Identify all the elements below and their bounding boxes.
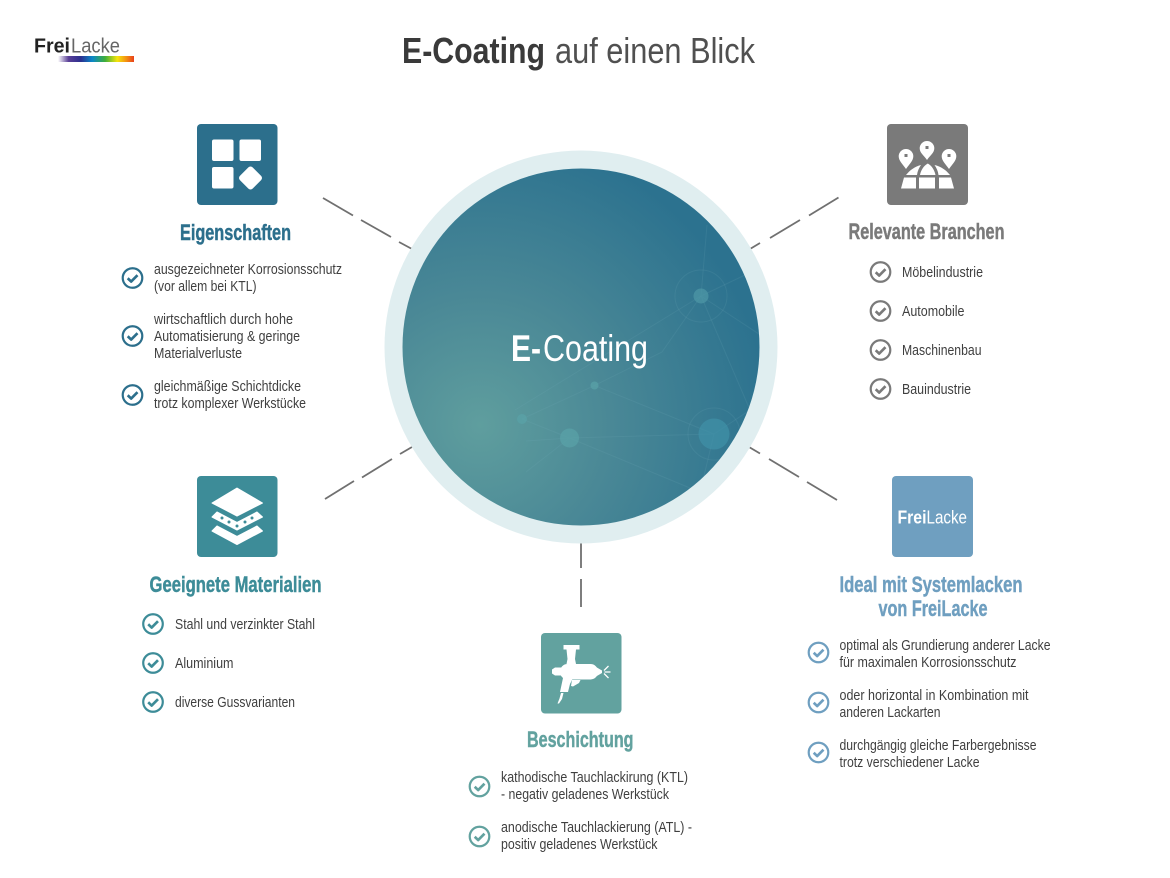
icon: spray gun bbox=[541, 633, 622, 714]
circle label: Coating bbox=[543, 328, 648, 369]
list: Möbelindustrie bbox=[902, 264, 983, 281]
central circle bbox=[384, 150, 778, 544]
list: Bauindustrie bbox=[902, 381, 971, 398]
list: anderen Lackarten bbox=[840, 704, 940, 721]
panel: Beschichtung bbox=[470, 633, 692, 853]
list: kathodische Tauchlackirung (KTL) bbox=[501, 769, 688, 786]
list: anodische Tauchlackierung (ATL) - bbox=[501, 819, 692, 836]
list: Maschinenbau bbox=[902, 342, 982, 359]
list bbox=[871, 262, 983, 399]
list: Automatisierung & geringe bbox=[154, 328, 300, 345]
heading: von FreiLacke bbox=[878, 596, 988, 621]
title bbox=[402, 30, 756, 71]
list: trotz komplexer Werkstücke bbox=[154, 395, 306, 412]
icon: FreiLacke tile bbox=[892, 476, 973, 557]
list: positiv geladenes Werkstück bbox=[501, 836, 658, 853]
icon: layers bbox=[197, 476, 278, 557]
network decoration bbox=[515, 225, 765, 488]
panel: Eigenschaften bbox=[123, 124, 342, 412]
list bbox=[809, 637, 1050, 771]
panel: Geeignete Materialien bbox=[143, 476, 322, 712]
list: - negativ geladenes Werkstück bbox=[501, 786, 669, 803]
list: diverse Gussvarianten bbox=[175, 694, 295, 711]
circle label bbox=[511, 328, 648, 369]
list: ausgezeichneter Korrosionsschutz bbox=[154, 261, 342, 278]
list: gleichmäßige Schichtdicke bbox=[154, 378, 301, 395]
list: Materialverluste bbox=[154, 345, 242, 362]
list: durchgängig gleiche Farbergebnisse bbox=[840, 737, 1036, 754]
list: wirtschaftlich durch hohe bbox=[153, 311, 293, 328]
panel: Relevante Branchen bbox=[848, 124, 1004, 399]
heading: Beschichtung bbox=[527, 727, 634, 752]
list: trotz verschiedener Lacke bbox=[840, 754, 980, 771]
heading: Geeignete Materialien bbox=[150, 572, 322, 597]
circle label: E- bbox=[511, 328, 541, 369]
list bbox=[143, 614, 315, 712]
list: oder horizontal in Kombination mit bbox=[840, 687, 1029, 704]
icon: FreiLacke tile: Frei bbox=[898, 508, 926, 528]
list bbox=[123, 261, 342, 412]
icon: FreiLacke tile: Lacke bbox=[926, 508, 967, 528]
icon: globe with pins bbox=[887, 124, 968, 205]
list: für maximalen Korrosionsschutz bbox=[840, 654, 1016, 671]
title: E-Coating bbox=[402, 30, 545, 71]
logo: FreiLacke: Lacke bbox=[71, 36, 120, 58]
list: optimal als Grundierung anderer Lacke bbox=[840, 637, 1050, 654]
list: Aluminium bbox=[175, 655, 234, 672]
title: auf einen Blick bbox=[555, 30, 756, 71]
connector dashes bbox=[323, 198, 838, 607]
heading: Ideal mit Systemlacken bbox=[840, 572, 1022, 597]
heading: Relevante Branchen bbox=[848, 219, 1004, 244]
heading: Eigenschaften bbox=[180, 220, 291, 245]
list: (vor allem bei KTL) bbox=[154, 278, 257, 295]
logo: FreiLacke bbox=[34, 36, 134, 62]
icon: tiles bbox=[197, 124, 278, 205]
list bbox=[470, 769, 692, 853]
panel: Ideal mit Systemlacken bbox=[809, 476, 1050, 771]
list: Stahl und verzinkter Stahl bbox=[175, 616, 315, 633]
list: Automobile bbox=[902, 303, 964, 320]
heading bbox=[840, 572, 1022, 621]
logo: FreiLacke: Frei bbox=[34, 36, 70, 58]
